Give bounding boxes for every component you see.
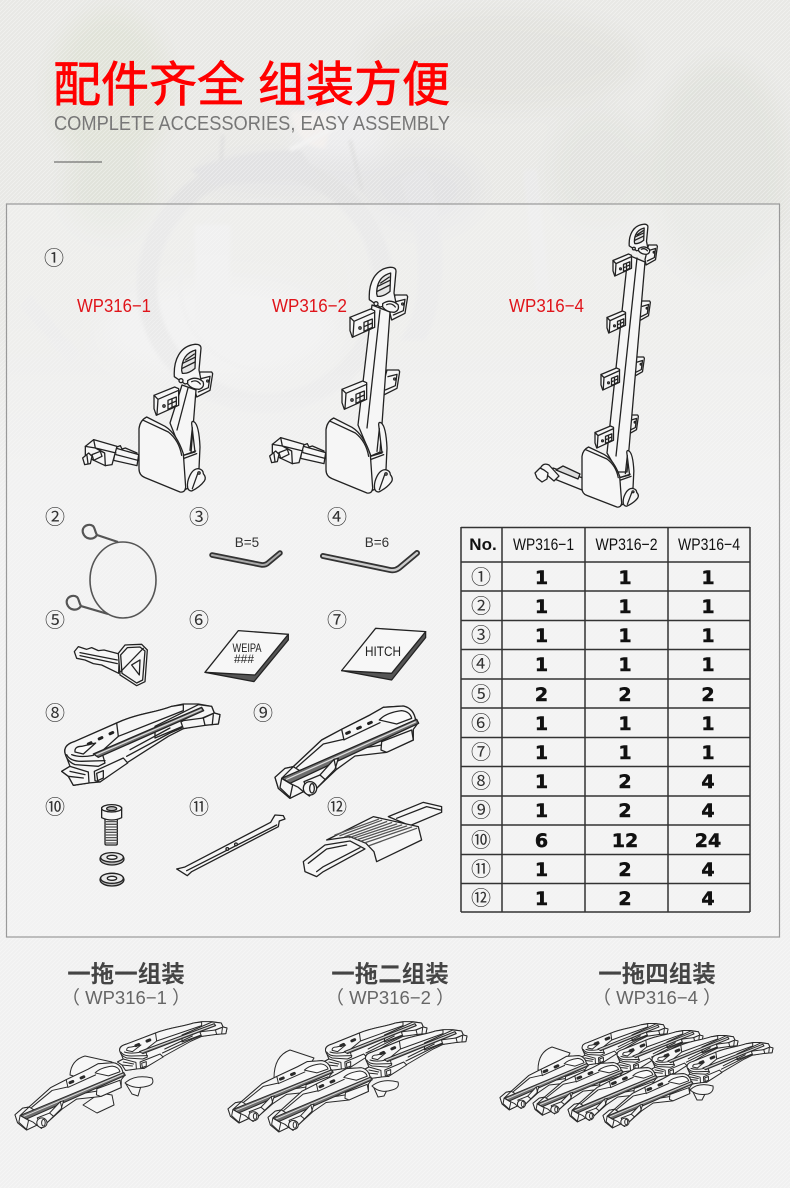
table row 8: 1 — [535, 771, 548, 793]
heading block — [53, 59, 450, 162]
model label WP316-2: WP316−2 — [272, 295, 347, 316]
table row 5: 2 — [535, 684, 548, 706]
table row 2: 1 — [701, 596, 715, 618]
table header: WP316−2 — [596, 535, 658, 554]
table header: No. — [469, 535, 497, 554]
table row 5: 2 — [701, 684, 715, 706]
table row 5: 2 — [618, 684, 632, 706]
table: quantities per model — [461, 527, 750, 912]
part 7 number: ⑦ — [327, 604, 347, 633]
part 3: 5mm hex key: B=5 — [235, 535, 259, 550]
part 12 number: ⑫ — [327, 791, 347, 820]
table row 11: 4 — [701, 859, 715, 881]
table row 12: 4 — [701, 888, 715, 910]
table row 1: 1 — [535, 567, 548, 589]
table row 8 — [471, 765, 715, 794]
part 2: safety cable — [67, 525, 156, 618]
part 6: WEIPA manual — [205, 631, 288, 682]
title: 组装方便 — [258, 59, 450, 112]
table row 1: ① — [471, 561, 491, 590]
part 4: 6mm hex key: B=6 — [365, 535, 389, 550]
part 4 number: ④ — [327, 501, 347, 530]
table row 12: 1 — [535, 888, 548, 910]
table row 7: 1 — [535, 742, 548, 764]
table row 10: 24 — [695, 830, 721, 852]
part 7: HITCH manual: HITCH — [365, 644, 401, 659]
table row 2: 1 — [535, 596, 548, 618]
assembly heading: 一拖四组装 — [598, 961, 716, 987]
part 3: 5mm hex key — [212, 535, 280, 565]
table row 2 — [471, 590, 715, 619]
table row 12 — [471, 882, 715, 911]
table header: WP316−4 — [678, 535, 740, 554]
table row 10: 12 — [612, 830, 638, 852]
table grid — [461, 527, 750, 912]
rack illustration WP316-4 — [535, 224, 657, 507]
title: 配件齐全 — [53, 59, 245, 112]
table row 2: ② — [471, 590, 491, 619]
table row 6 — [471, 707, 715, 736]
model label WP316-1: WP316−1 — [77, 295, 151, 316]
assembly model name: （ WP316−2 ） — [325, 987, 455, 1008]
assembly: two-bike WP316-2 — [228, 961, 467, 1132]
table row 1 — [471, 561, 715, 590]
table row 6: 1 — [701, 713, 715, 735]
table row 12: ⑫ — [471, 882, 491, 911]
part 6: WEIPA manual: ### — [234, 654, 255, 666]
table row 4: 1 — [701, 654, 715, 676]
part 10 number: ⑩ — [45, 791, 65, 820]
subtitle: COMPLETE ACCESSORIES, EASY ASSEMBLY — [54, 112, 450, 135]
table row 4: 1 — [535, 654, 548, 676]
table row 5 — [471, 678, 715, 707]
assembly: one-bike WP316-1 — [15, 961, 227, 1130]
table row 11: ⑪ — [471, 853, 491, 882]
panel: parts list — [6, 204, 780, 937]
assembly heading: 一拖二组装 — [331, 961, 449, 987]
table row 1: 1 — [618, 567, 632, 589]
table row 4: 1 — [618, 654, 632, 676]
table row 9: 2 — [618, 800, 632, 822]
assembly drawing — [15, 1022, 227, 1130]
table row 3: 1 — [701, 625, 715, 647]
table background — [461, 527, 750, 912]
table row 11 — [471, 853, 715, 882]
table row 3 — [471, 619, 715, 648]
table row 5: ⑤ — [471, 678, 491, 707]
title — [53, 59, 450, 112]
table header — [469, 535, 740, 554]
table row 7: 1 — [701, 742, 715, 764]
part 11: flat strap — [177, 815, 285, 876]
part 6: WEIPA manual: WEIPA — [232, 643, 262, 655]
assembly model name: （ WP316−4 ） — [592, 987, 722, 1008]
table row 3: 1 — [618, 625, 632, 647]
model label WP316-4: WP316−4 — [509, 295, 584, 316]
part 5 number: ⑤ — [45, 604, 65, 633]
table row 12: 2 — [618, 888, 632, 910]
table header: WP316−1 — [513, 535, 574, 554]
table row 7 — [471, 736, 715, 765]
table row 6: ⑥ — [471, 707, 491, 736]
table row 8: 2 — [618, 771, 632, 793]
table row 4: ④ — [471, 648, 491, 677]
assembly drawing — [500, 1024, 773, 1128]
table row 3: 1 — [535, 625, 548, 647]
part 6 number: ⑥ — [189, 604, 209, 633]
rack illustration WP316-1 — [83, 344, 213, 492]
part 11 number: ⑪ — [189, 791, 209, 820]
panel frame — [6, 204, 780, 937]
part 5: key — [74, 644, 147, 686]
table row 10 — [471, 824, 721, 853]
rack illustration WP316-2 — [270, 267, 408, 493]
table row 6: 1 — [618, 713, 632, 735]
part 3 number: ③ — [189, 501, 209, 530]
table row 9 — [471, 794, 715, 823]
part 2 number: ② — [45, 501, 65, 530]
title rule — [54, 162, 102, 163]
table row 6: 1 — [535, 713, 548, 735]
table row 7: 1 — [618, 742, 632, 764]
table row 9: 4 — [701, 800, 715, 822]
part 7: HITCH manual — [342, 628, 426, 680]
part 9 number: ⑨ — [253, 697, 273, 726]
assembly drawing — [228, 1022, 467, 1132]
table row 4 — [471, 648, 715, 677]
assembly model name: （ WP316−1 ） — [61, 987, 191, 1008]
table row 8: 4 — [701, 771, 715, 793]
table row 9: 1 — [535, 800, 548, 822]
part 12: rail connector — [303, 802, 442, 877]
part 8: wheel tray with loop — [62, 704, 220, 785]
table row 9: ⑨ — [471, 794, 491, 823]
part 4: 6mm hex key — [323, 535, 417, 570]
part 1 number: ① — [44, 242, 64, 271]
assembly: four-bike WP316-4 — [500, 961, 773, 1128]
table row 10: 6 — [535, 830, 548, 852]
table row 11: 2 — [618, 859, 632, 881]
table row 1: 1 — [701, 567, 715, 589]
table row 3: ③ — [471, 619, 491, 648]
part 10: bolt and washers — [100, 805, 124, 886]
part 8 number: ⑧ — [45, 697, 65, 726]
table row 11: 1 — [535, 859, 548, 881]
assembly heading: 一拖一组装 — [67, 961, 185, 987]
table row 8: ⑧ — [471, 765, 491, 794]
table row 2: 1 — [618, 596, 632, 618]
table row 10: ⑩ — [471, 824, 491, 853]
table row 7: ⑦ — [471, 736, 491, 765]
part 9: wheel tray with strap — [275, 706, 419, 798]
